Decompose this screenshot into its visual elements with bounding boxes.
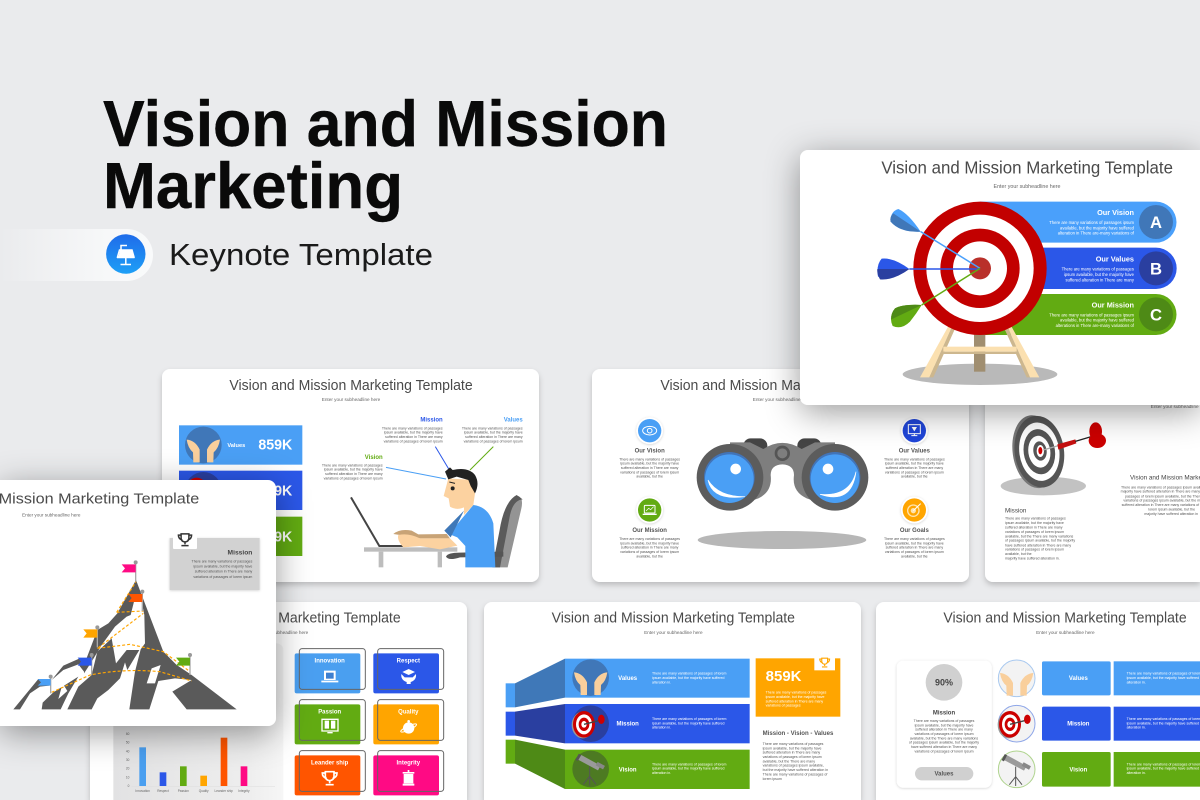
- stat card 859K: There are many variations of passages: [766, 691, 827, 695]
- ribbon C: our mission: There are many variations of passages ipsum: [1049, 313, 1134, 318]
- chart card: 50: [126, 741, 130, 745]
- main title: Vision and Mission: [103, 87, 668, 160]
- ribbon A: our vision: alteration in There are-many variations of: [1058, 231, 1135, 236]
- item: our goals: variations of passages of lorem ipsum: [885, 550, 944, 554]
- callout: values: variations of passages of lorem ipsum: [464, 440, 523, 444]
- ribbon: values: [506, 659, 750, 707]
- ribbon B: our values: suffered alteration in There are many: [1065, 277, 1135, 282]
- row: values: ipsum available, but the majority have suffered: [1127, 676, 1199, 680]
- mission summary card: ipsum available, but the majority have: [915, 723, 973, 727]
- tile: leadership: [295, 751, 365, 795]
- panel: target hero slide: Enter your subheadline here: [994, 184, 1061, 190]
- callout: mission box: ipsum available, but the majority have: [194, 564, 252, 568]
- mission summary card: have suffered alteration in There are many: [911, 745, 977, 749]
- ribbon: vision: alteration in.: [652, 771, 671, 775]
- chart card: 60: [126, 732, 130, 736]
- row: mission: Mission: [1067, 721, 1090, 727]
- mission summary card: suffered alteration in There are many: [915, 728, 973, 732]
- tile: integrity: Integrity: [397, 761, 421, 767]
- panel: values tiles and chart: [90, 602, 467, 800]
- callout: values: There are many variations of passages: [462, 426, 523, 430]
- chart card: 10: [126, 775, 130, 779]
- item: our vision: [619, 417, 680, 479]
- panel: ribbons: [484, 602, 861, 800]
- text block: mission vision values: variations of passages of lorem ipsum: [763, 755, 822, 759]
- callout: vision: [322, 455, 446, 481]
- item: our values: Our Values: [899, 448, 931, 454]
- item: our mission: variations of passages of lorem ipsum: [620, 550, 679, 554]
- callout: mission box: There are many variations of passages: [192, 560, 253, 564]
- ribbon: mission: ipsum available, but the majority have suffered: [652, 721, 724, 725]
- text block: mission: majority have suffered alteration in.: [1005, 557, 1060, 561]
- panel: target hero slide: Vision and Mission Marketing Template: [881, 157, 1173, 177]
- mission summary card: Mission: [933, 711, 955, 717]
- ribbon: values: ipsum available, but the majority have suffered: [652, 676, 724, 680]
- stat card 859K: 859K: [766, 668, 802, 685]
- chart card: 20: [126, 767, 130, 771]
- callout: mission: [382, 418, 449, 470]
- ribbon: mission: alteration in.: [652, 726, 671, 730]
- ribbon B: our values: B: [1150, 259, 1162, 278]
- callout: mission: There are many variations of passages: [382, 426, 443, 430]
- callout: mission box: variations of passages of lorem ipsum: [193, 575, 252, 579]
- ribbon A: our vision: Our Vision: [1097, 208, 1135, 217]
- callout: values: [462, 418, 523, 470]
- callout: vision: suffered alteration in There are many: [325, 472, 383, 476]
- ribbon: vision: ipsum available, but the majority have suffered: [652, 767, 724, 771]
- illustration: binoculars: [697, 438, 868, 549]
- dart: blue: [890, 209, 980, 268]
- tile: quality: [373, 700, 444, 744]
- panel: mountain slide: Enter your subheadline here: [22, 512, 81, 517]
- illustration: target on easel: [903, 202, 1057, 385]
- text block: mission vision values: lorem ipsum: [763, 777, 782, 781]
- stat bar: values: [179, 425, 302, 465]
- item: our vision: Our Vision: [635, 448, 665, 454]
- tile: innovation: [295, 649, 365, 693]
- callout: mission: variations of passages of lorem ipsum: [384, 440, 443, 444]
- item: our mission: available, but the: [636, 554, 663, 558]
- chart card: Respect: [157, 789, 169, 793]
- row: vision: Vision: [1069, 767, 1088, 773]
- panel: binoculars: Enter your subheadline here: [753, 397, 812, 402]
- mission summary card: 90%: [935, 678, 953, 688]
- panel: target hero slide: [800, 150, 1200, 405]
- item: our values: suffered alteration in There are many: [886, 466, 943, 470]
- item: our vision: suffered alteration in There are many: [621, 466, 679, 470]
- main title: Marketing: [103, 149, 403, 222]
- panel: mountain slide: [0, 480, 276, 726]
- callout: vision: There are many variations of passages: [322, 463, 383, 467]
- text block: mission: variations of passages of lorem ipsum: [1005, 548, 1064, 552]
- row: mission: alteration in.: [1127, 726, 1146, 730]
- item: our goals: suffered alteration in There are many: [886, 546, 943, 550]
- chart card: Passion: [178, 789, 189, 793]
- item: our goals: available, but the: [901, 554, 928, 558]
- text block: mission: variations of passages of lorem ipsum: [1005, 530, 1064, 534]
- tile: integrity: [373, 751, 444, 795]
- ribbon: vision: There are many variations of passages of lorem: [652, 762, 727, 766]
- text block: mission: available, but the: [1005, 552, 1032, 556]
- text block: mission vision values: [763, 730, 834, 781]
- item: our vision: ipsum available, but the majority have: [620, 462, 679, 466]
- panel: values tiles and chart: Enter your subheadline here: [250, 630, 309, 635]
- ribbon C: our mission: C: [1150, 305, 1162, 324]
- text block: mission vision values: available, but the There are many: [763, 759, 815, 763]
- tile: respect: [373, 649, 444, 693]
- item: our vision: variations of passages of lorem ipsum: [620, 470, 679, 474]
- keynote badge: [0, 229, 153, 281]
- text block: mission vision values: There are many variations of passages: [763, 742, 824, 746]
- stat bar: vision: [179, 517, 302, 556]
- item: our values: ipsum available, but the majority have: [885, 462, 944, 466]
- panel: dartboard: [982, 405, 1200, 588]
- ribbon: mission: Mission: [617, 721, 639, 727]
- row: vision: [998, 751, 1200, 788]
- text block: mission vision values: Mission - Vision - Values: [763, 730, 834, 737]
- tile: innovation: Innovation: [315, 658, 345, 664]
- ribbon C: our mission: [980, 294, 1176, 335]
- callout: vision: variations of passages of lorem ipsum: [324, 477, 383, 481]
- callout: vision: ipsum available, but the majority have: [324, 468, 383, 472]
- item: our mission: Our Mission: [632, 528, 667, 534]
- stat bar: values: Values: [227, 443, 245, 449]
- item: our mission: suffered alteration in There are many: [621, 546, 679, 550]
- text block: vision and mission: [1121, 474, 1200, 516]
- ribbon: values: alteration in.: [652, 680, 671, 684]
- item: our values: [884, 417, 945, 479]
- panel: ribbons: Vision and Mission Marketing Template: [552, 611, 795, 627]
- ribbon B: our values: [1043, 248, 1177, 289]
- stat bar: values: 859K: [258, 438, 293, 454]
- panel: mission card with rows: Enter your subheadline here: [1036, 630, 1095, 635]
- ribbon C: our mission: alterations in There are-many variations of: [1056, 323, 1135, 328]
- ribbon B: our values: ipsum available, but the majority have: [1064, 272, 1135, 277]
- panel: mission card with rows: Vision and Mission Marketing Template: [943, 611, 1187, 627]
- callout: mission: Mission: [420, 418, 443, 424]
- row: values: There are many variations of passages of lorem: [1127, 672, 1200, 676]
- panel: person at laptop: Vision and Mission Marketing Template: [229, 378, 473, 394]
- panel: person at laptop: [162, 369, 539, 582]
- item: our mission: ipsum available, but the majority have: [620, 541, 679, 545]
- flags: [38, 560, 192, 693]
- row: vision: alteration in.: [1127, 771, 1146, 775]
- text block: mission: available, but the There are many variations: [1005, 534, 1074, 538]
- mission summary card: available, but the There are many variations: [910, 736, 978, 740]
- ribbon B: our values: There are many variations of passages: [1062, 267, 1134, 272]
- row: mission: There are many variations of passages of lorem: [1127, 717, 1200, 721]
- callout: vision: Vision: [365, 455, 383, 461]
- tile: quality: Quality: [398, 709, 419, 715]
- stat bar: mission: [179, 471, 302, 510]
- item: our goals: Our Goals: [900, 528, 929, 534]
- illustration: mountain: [13, 580, 237, 709]
- chart card: 30: [126, 758, 130, 762]
- ribbon A: our vision: A: [1150, 213, 1162, 232]
- ribbon A: our vision: available, but the majority have suffered: [1060, 225, 1135, 230]
- item: our mission: There are many variations of passages: [619, 537, 680, 541]
- callout: values: suffered alteration in There are many: [465, 435, 523, 439]
- chart card: [113, 643, 283, 800]
- ribbon A: our vision: There are many variations of passages ipsum: [1049, 220, 1134, 225]
- chart card: Innovation: [135, 789, 150, 793]
- panel: ribbons: Enter your subheadline here: [644, 630, 703, 635]
- stat bar: mission: 859K: [258, 483, 293, 499]
- stat card 859K: suffered alteration in There are many: [766, 699, 823, 703]
- main title: [103, 87, 668, 222]
- ribbon B: our values: Our Values: [1096, 255, 1134, 264]
- chart card: Quality: [199, 789, 209, 793]
- item: our goals: [884, 497, 945, 558]
- text block: mission: [1005, 507, 1075, 561]
- chart card: Integrity: [238, 789, 250, 793]
- row: values: [998, 660, 1200, 697]
- callout: mission box: Mission: [228, 550, 252, 557]
- panel: mountain slide: Mission Marketing Template: [0, 491, 199, 507]
- ribbon A: our vision: [980, 202, 1176, 243]
- mission summary card: [897, 661, 992, 788]
- chart card: 40: [126, 749, 130, 753]
- mission summary card: of passages ipsum available, but the majority: [909, 741, 979, 745]
- callout: mission box: [170, 530, 260, 590]
- stat card 859K: ipsum available, but the majority have: [766, 695, 825, 699]
- row: mission: [998, 705, 1200, 742]
- row: values: Values: [1069, 676, 1088, 682]
- callout: mission box: suffered alteration in There are many: [195, 570, 253, 574]
- callout: mission: suffered alteration in There are many: [385, 435, 443, 439]
- illustration: dartboard: [1001, 412, 1106, 495]
- ribbon: vision: Vision: [619, 767, 637, 773]
- chart card: Leander ship: [215, 789, 233, 793]
- ribbon C: our mission: available, but the majority have suffered: [1060, 318, 1135, 323]
- panel: binoculars: [592, 369, 969, 582]
- stat bar: vision: 859K: [258, 529, 293, 545]
- callout: values: Values: [504, 418, 523, 424]
- dart: green: [891, 268, 980, 327]
- mission summary card: variations of passages of lorem ipsum: [914, 732, 974, 736]
- dart: dark blue: [877, 259, 980, 279]
- callout: mission: ipsum available, but the majority have: [384, 431, 443, 435]
- row: vision: There are many variations of passages of lorem: [1127, 762, 1200, 766]
- panel: binoculars: Vision and Mission Marketing Template: [660, 378, 904, 394]
- mission summary card: Values: [935, 772, 954, 778]
- callout: values: ipsum available, but the majority have: [464, 431, 523, 435]
- mission summary card: variations of passages of lorem ipsum: [914, 749, 974, 753]
- text block: mission: of passages ipsum available, but the majority: [1005, 539, 1075, 543]
- panel: mission card with rows: [876, 602, 1200, 800]
- item: our values: There are many variations of passages: [884, 457, 945, 461]
- item: our values: available, but the: [901, 475, 928, 479]
- text block: mission vision values: variations of passages ipsum available,: [763, 764, 824, 768]
- tile: respect: Respect: [397, 658, 420, 664]
- stat card 859K: [756, 655, 840, 717]
- ribbon: vision: [506, 740, 750, 789]
- item: our goals: There are many variations of passages: [884, 537, 945, 541]
- illustration: person at laptop: [351, 467, 523, 567]
- row: values: alteration in.: [1127, 680, 1146, 684]
- text block: vision and mission: majority have suffered alteration in: [1144, 512, 1198, 516]
- item: our values: variations of passages of lorem ipsum: [885, 470, 944, 474]
- tile: leadership: Leander ship: [311, 761, 349, 767]
- item: our mission: [619, 497, 680, 558]
- ribbon: mission: [506, 704, 750, 743]
- chart card: 0: [128, 784, 130, 788]
- tile: passion: [295, 700, 365, 744]
- text block: vision and mission: lorem ipsum available, but the: [1148, 508, 1195, 512]
- panel: person at laptop: Enter your subheadline here: [322, 397, 381, 402]
- text block: mission: have suffered alteration in There are many: [1005, 543, 1071, 547]
- text block: mission vision values: but the majority have suffered alteration in: [763, 768, 828, 772]
- ribbon: values: There are many variations of passages of lorem: [652, 672, 727, 676]
- tile: passion: Passion: [318, 709, 341, 715]
- ribbon: values: Values: [618, 676, 638, 682]
- text block: mission vision values: suffered alteration in There are many: [763, 751, 820, 755]
- mission summary card: There are many variations of passages: [914, 719, 975, 723]
- item: our vision: available, but the: [636, 475, 663, 479]
- subtitle: Keynote Template: [169, 237, 433, 272]
- text block: mission: There are many variations of passages: [1005, 516, 1066, 520]
- item: our vision: There are many variations of passages: [619, 457, 680, 461]
- text block: mission vision values: There are many variations of passages of: [763, 773, 827, 777]
- text block: mission vision values: ipsum available, but the majority have: [763, 746, 822, 750]
- ribbon: mission: There are many variations of passages of lorem: [652, 717, 727, 721]
- stat card 859K: variations of passages: [766, 704, 801, 708]
- panel: values tiles and chart: Vision and Mission Marketing Template: [157, 611, 401, 627]
- row: mission: ipsum available, but the majority have suffered: [1127, 721, 1199, 725]
- text block: mission: Mission: [1005, 507, 1027, 514]
- text block: mission: ipsum available, but the majority have: [1005, 521, 1064, 525]
- text block: mission: suffered alteration in There are many: [1005, 525, 1063, 529]
- ribbon C: our mission: Our Mission: [1092, 301, 1135, 310]
- row: vision: ipsum available, but the majority have suffered: [1127, 767, 1199, 771]
- item: our goals: ipsum available, but the majority have: [885, 541, 944, 545]
